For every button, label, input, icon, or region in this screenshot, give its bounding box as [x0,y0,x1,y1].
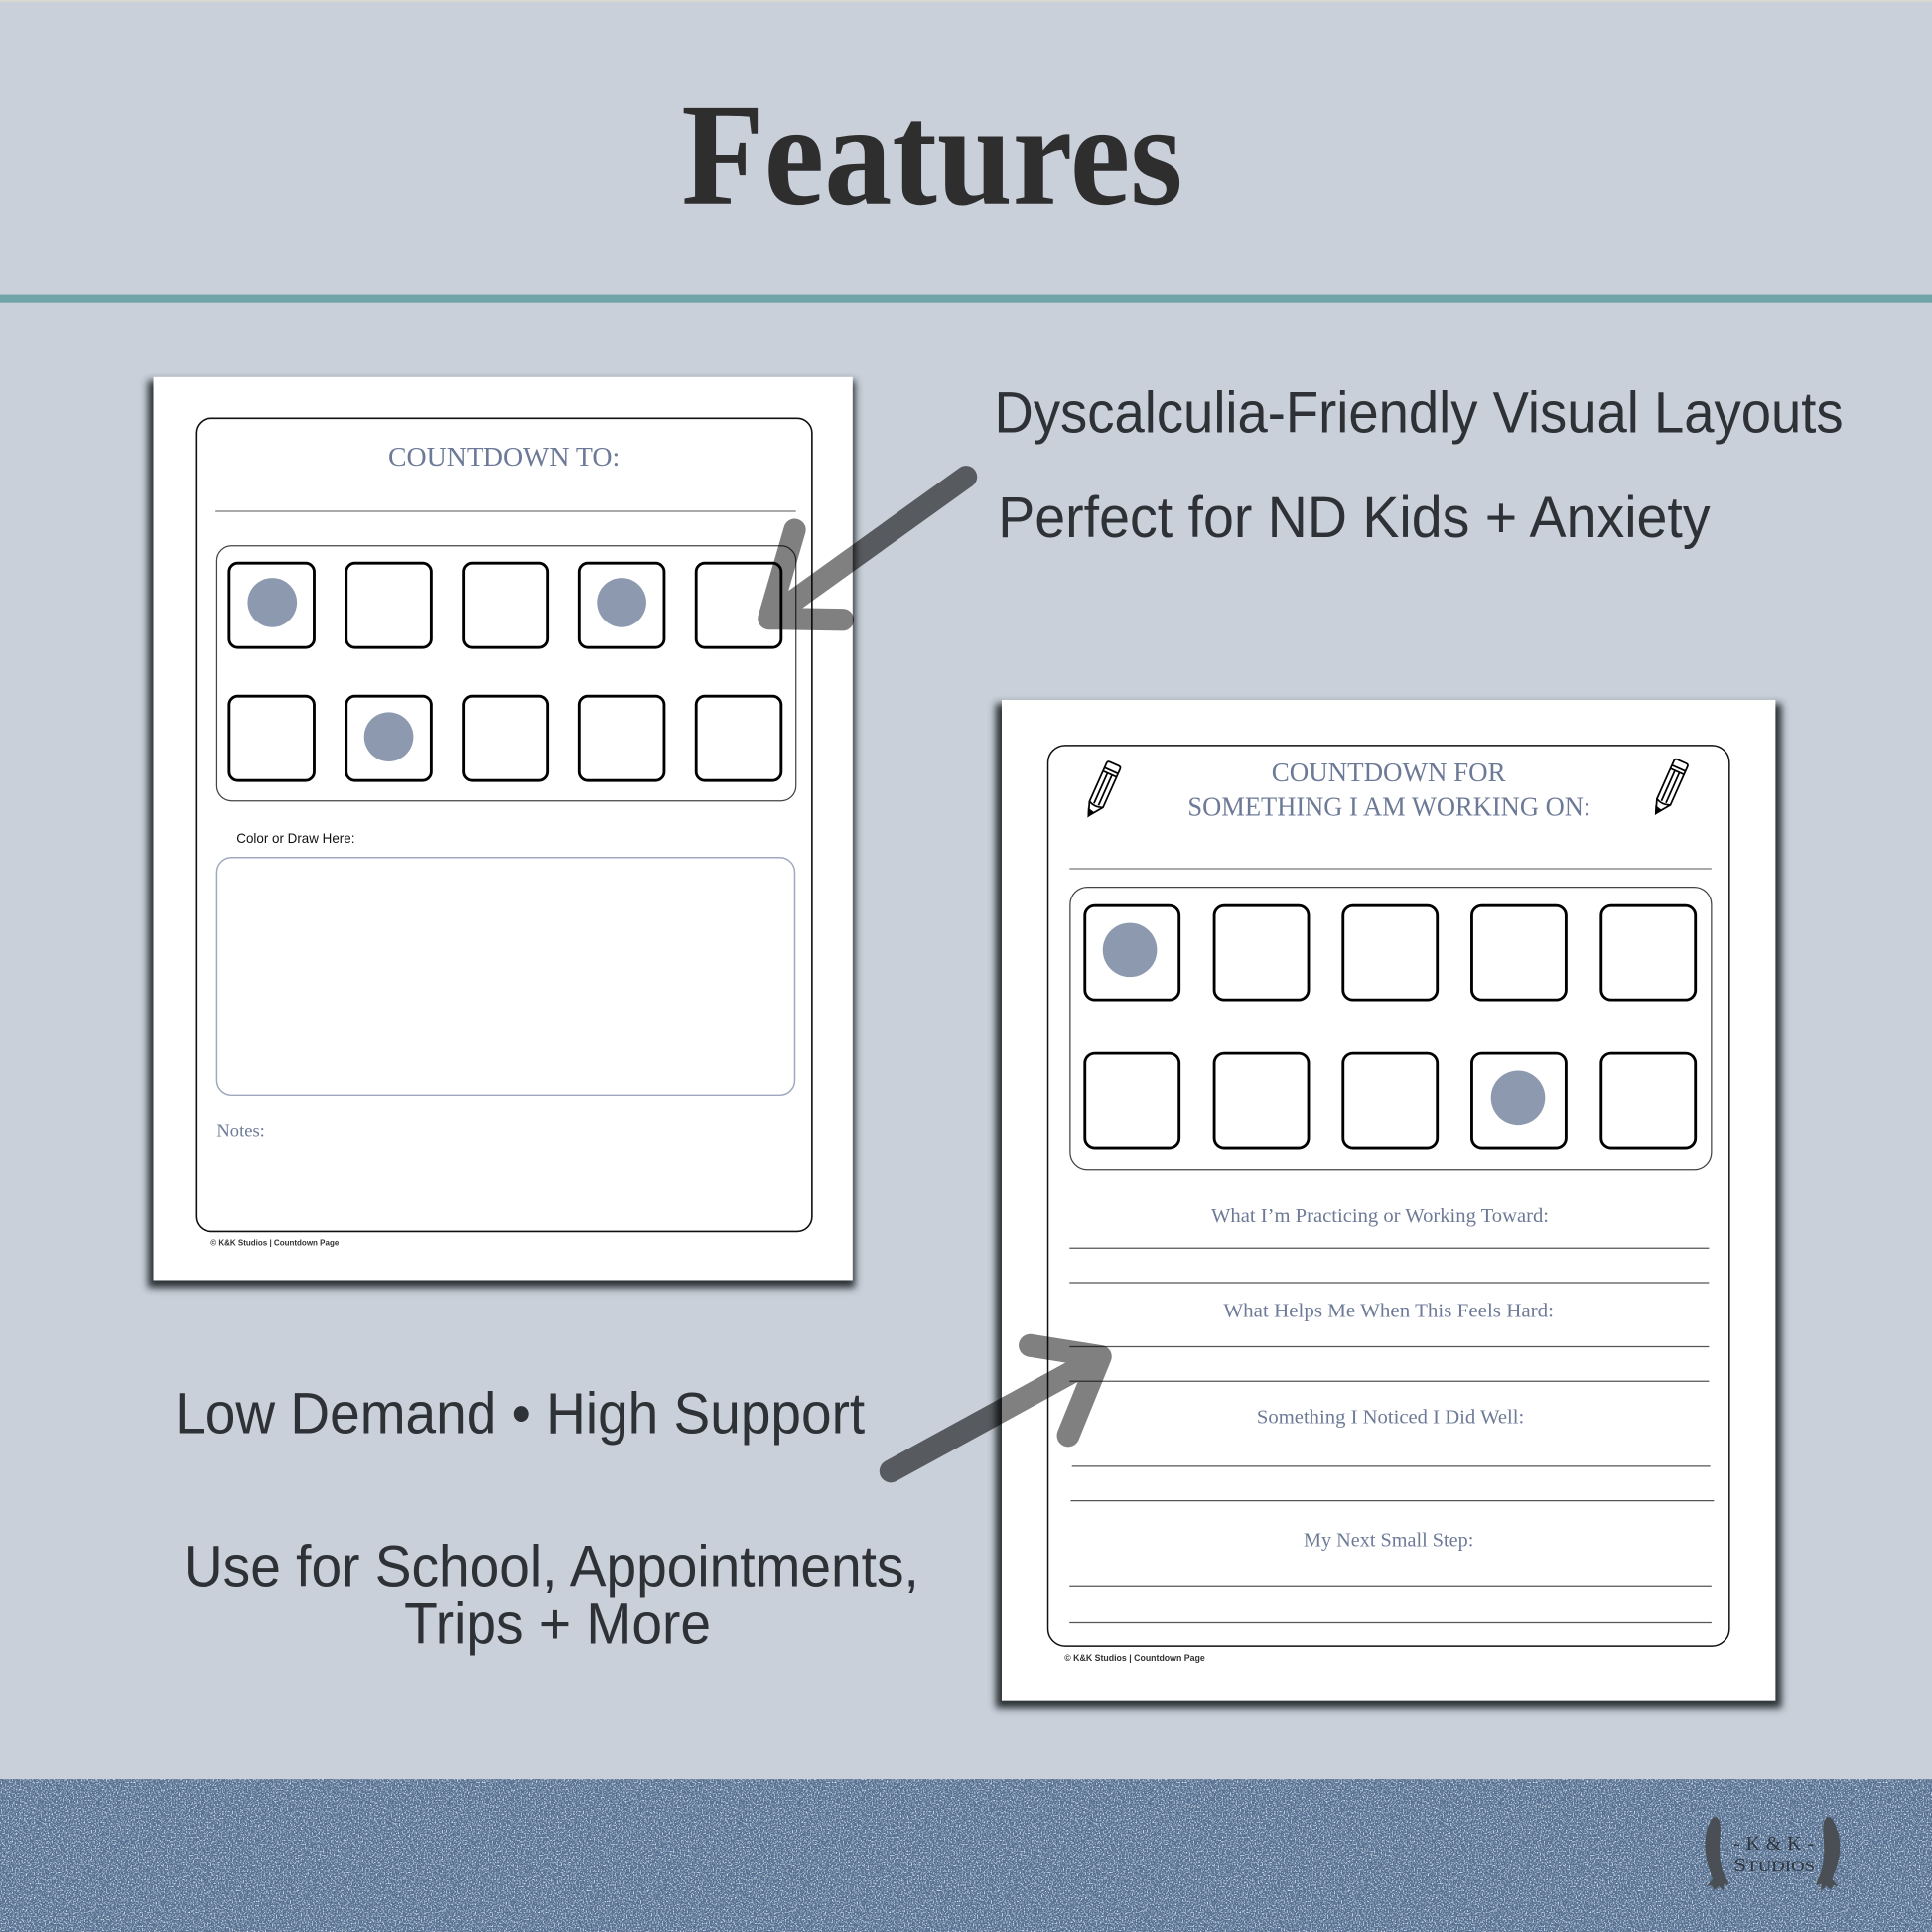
panel: countdown to worksheet [148,377,855,1288]
worksheet heading [1187,758,1590,823]
writing lines: did well [1070,1466,1714,1501]
writing lines: helps [1069,1346,1709,1381]
grid container [1070,888,1712,1170]
page shadow [996,704,1782,1708]
teal header divider [0,295,1932,303]
page sheet [154,377,853,1280]
draw box [216,858,794,1095]
arrow: to second worksheet [891,1345,1100,1471]
grid container [216,546,796,801]
worksheet heading: COUNTDOWN FOR [1272,758,1506,788]
worksheet heading: COUNTDOWN TO: [388,442,620,473]
top edge line [0,0,1932,2]
feature text: ND kids: Perfect for ND Kids + Anxiety [998,485,1711,550]
notes label: Notes: [216,1120,265,1140]
title: Features [681,74,1182,235]
page frame [196,418,812,1231]
page frame [1048,746,1729,1646]
icon: right feather [1816,1817,1840,1891]
arrow: to first worksheet [768,477,966,620]
icon: left pencil [1084,760,1121,820]
logo [1706,1817,1840,1891]
page sheet [1002,700,1775,1701]
feature text: dyscalculia: Dyscalculia-Friendly Visual Layouts [995,381,1844,446]
feature text: uses: Trips + More [404,1592,711,1657]
logo text top: - K & K - [1733,1833,1814,1855]
icon: left feather [1706,1817,1728,1891]
feature text: low demand: Low Demand • High Support [175,1381,865,1446]
draw label: Color or Draw Here: [236,831,354,846]
prompt: did well: Something I Noticed I Did Well: [1257,1406,1524,1428]
writing lines: practicing [1069,1248,1709,1283]
panel: working on worksheet [996,700,1782,1708]
prompt: next step: My Next Small Step: [1304,1530,1473,1552]
logo text bottom: STUDIOS [1733,1855,1815,1876]
feature text: uses: Use for School, Appointments, [184,1534,919,1598]
writing lines: next step [1069,1586,1712,1622]
heading rule [215,510,796,512]
copyright: © K&K Studios | Countdown Page [1064,1653,1205,1663]
worksheet heading: SOMETHING I AM WORKING ON: [1187,792,1590,823]
feature text: uses [184,1534,919,1657]
page shadow [148,380,855,1288]
footer band [0,1779,1932,1932]
prompt: practicing: What I’m Practicing or Working Toward: [1211,1205,1549,1227]
countdown squares [1085,905,1696,1148]
icon: right pencil [1651,759,1689,817]
countdown squares [229,563,781,780]
prompt: helps: What Helps Me When This Feels Hard: [1223,1301,1554,1322]
heading rule [1069,868,1712,870]
copyright: © K&K Studios | Countdown Page [210,1238,339,1248]
